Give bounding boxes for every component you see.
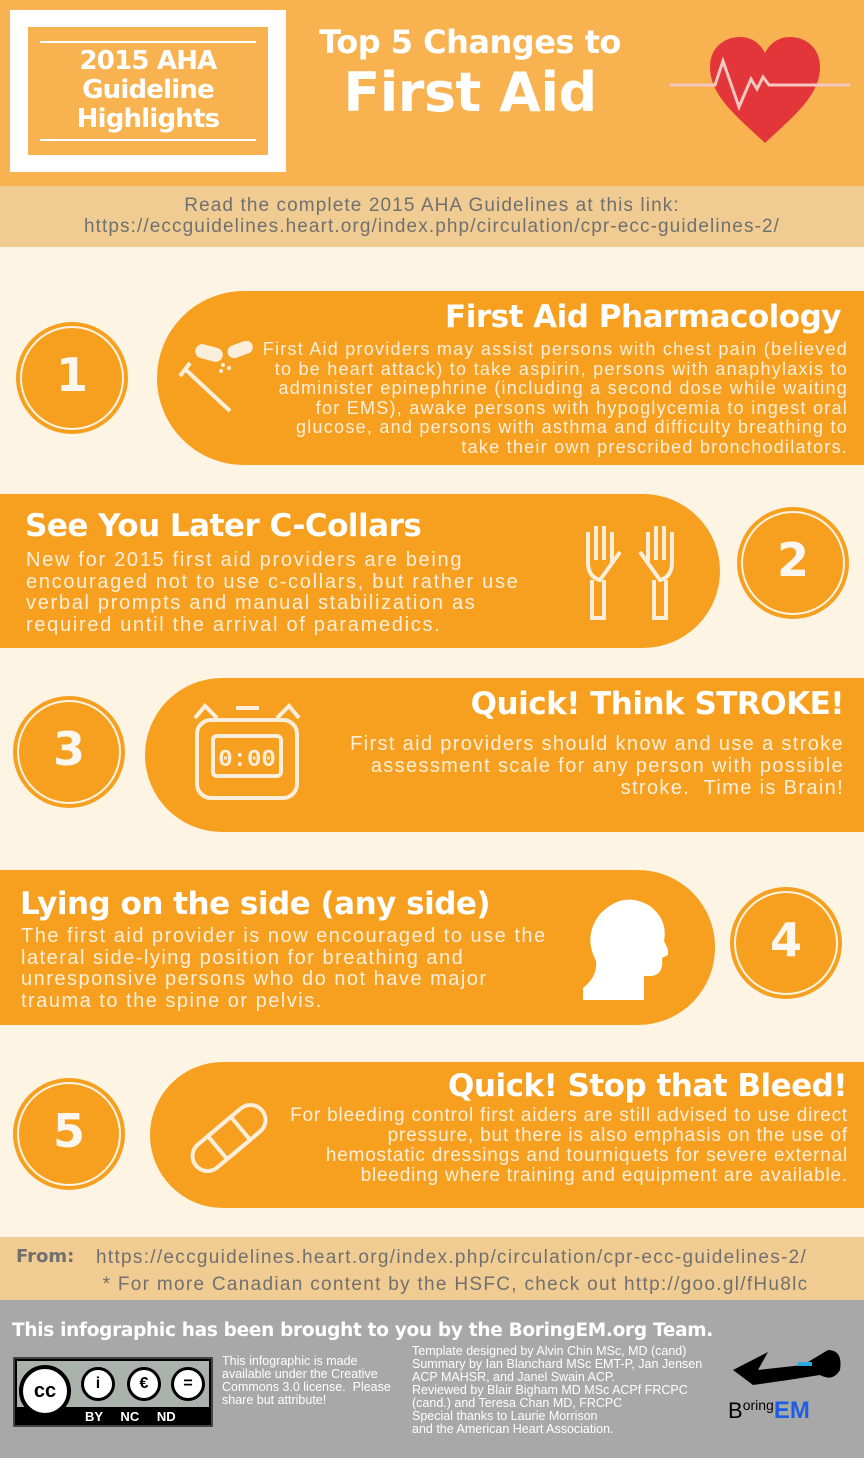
heading 2: See You Later C-Collars — [25, 508, 421, 544]
credits: ACP MAHSR, and Janel Swain ACP. — [412, 1370, 615, 1384]
text 1: First Aid providers may assist persons with chest pain (believed — [263, 339, 848, 359]
circle 3: 3 — [53, 722, 85, 776]
circle 4 — [730, 887, 842, 999]
from band: * For more Canadian content by the HSFC, check out http://goo.gl/fHu8lc — [103, 1274, 808, 1295]
footer heading: This infographic has been brought to you by the BoringEM.org Team. — [12, 1320, 713, 1341]
panel 1 — [157, 291, 864, 465]
circle 1 — [16, 322, 128, 434]
from band: From: — [16, 1246, 74, 1267]
text 5: pressure, but there is also emphasis on the use of — [388, 1125, 848, 1146]
circle 5 — [13, 1078, 125, 1190]
text 2: verbal prompts and manual stabilization as — [26, 592, 476, 614]
credits: Summary by Ian Blanchard MSc EMT-P, Jan Jensen — [412, 1357, 702, 1371]
panel 5 — [150, 1062, 864, 1208]
text 2: New for 2015 first aid providers are being — [26, 549, 463, 571]
text 1: administer epinephrine (including a second dose while waiting — [278, 378, 848, 398]
icon: pills syringe — [178, 341, 253, 412]
text 2: encouraged not to use c-collars, but rather use — [26, 570, 519, 592]
icon: bandage — [190, 1103, 268, 1173]
text 5: bleeding where training and equipment are available. — [361, 1165, 848, 1186]
license text: Commons 3.0 license. Please — [222, 1380, 391, 1394]
text 1: take their own prescribed bronchodilators. — [461, 436, 848, 456]
text 4: trauma to the spine or pelvis. — [21, 990, 323, 1012]
text 4 — [21, 925, 547, 1012]
credits: Reviewed by Blair Bigham MD MSc ACPf FRCPC — [412, 1383, 688, 1397]
heading 1: First Aid Pharmacology — [445, 299, 841, 335]
text 1: glucose, and persons with asthma and difficulty breathing to — [296, 417, 848, 437]
credits: and the American Heart Association. — [412, 1422, 614, 1436]
credits: Template designed by Alvin Chin MSc, MD (cand) — [412, 1344, 686, 1358]
circle 4: 4 — [770, 913, 802, 967]
circle 5: 5 — [53, 1104, 85, 1158]
title: First Aid — [343, 61, 597, 124]
text 2: required until the arrival of paramedics. — [26, 614, 441, 636]
text 3: stroke. Time is Brain! — [621, 777, 844, 799]
cc license badge: € — [140, 1375, 148, 1392]
icon: hands — [586, 526, 674, 620]
title: Top 5 Changes to — [319, 23, 621, 61]
cc license badge — [13, 1357, 213, 1427]
link band: https://eccguidelines.heart.org/index.php/circulation/cpr-ecc-guidelines-2/ — [84, 216, 780, 237]
text 5: hemostatic dressings and tourniquets for severe external — [326, 1145, 848, 1166]
text 3: assessment scale for any person with possible — [371, 755, 844, 777]
icon: heart — [670, 37, 850, 143]
cc license badge: cc — [34, 1380, 56, 1402]
header badge: 2015 AHA — [79, 46, 217, 76]
circle 1: 1 — [56, 348, 88, 402]
circle 2 — [737, 507, 849, 619]
icon: timer: 0:00 — [218, 747, 276, 774]
text 1: to be heart attack) to take aspirin, persons with anaphylaxis to — [275, 358, 848, 378]
credits: (cand.) and Teresa Chan MD, FRCPC — [412, 1396, 622, 1410]
circle 2: 2 — [777, 533, 809, 587]
license text: This infographic is made — [222, 1354, 357, 1368]
license text: share but attribute! — [222, 1393, 326, 1407]
circle 3 — [13, 696, 125, 808]
icon: head — [583, 900, 668, 1000]
heading 4: Lying on the side (any side) — [20, 886, 490, 922]
logo: BoringEM — [728, 1350, 840, 1424]
cc license badge: = — [183, 1375, 193, 1392]
header badge — [10, 10, 286, 172]
text 3: First aid providers should know and use a stroke — [350, 733, 844, 755]
text 4: unresponsive persons who do not have major — [21, 968, 488, 990]
text 4: lateral side-lying position for breathing and — [21, 946, 464, 968]
footer — [0, 1300, 864, 1458]
text 5: For bleeding control first aiders are still advised to use direct — [290, 1105, 848, 1126]
text 2 — [26, 549, 519, 636]
header badge: Guideline — [82, 75, 214, 105]
heading 5: Quick! Stop that Bleed! — [448, 1068, 847, 1104]
icon: timer — [194, 703, 300, 800]
header badge: Highlights — [77, 104, 219, 134]
link band — [0, 186, 864, 247]
text 1: for EMS), awake persons with hypoglycemia to ingest oral — [316, 398, 848, 418]
text 4: The first aid provider is now encouraged to use the — [21, 925, 547, 947]
header — [0, 0, 864, 186]
license text: available under the Creative — [222, 1367, 378, 1381]
heading 3: Quick! Think STROKE! — [471, 686, 844, 722]
from band: https://eccguidelines.heart.org/index.php/circulation/cpr-ecc-guidelines-2/ — [96, 1247, 807, 1268]
license text — [222, 1354, 391, 1407]
logo: BoringEM: BoringEM — [728, 1397, 810, 1424]
cc license badge: i — [96, 1375, 100, 1392]
text 1 — [263, 339, 848, 457]
credits — [412, 1344, 702, 1436]
credits: Special thanks to Laurie Morrison — [412, 1409, 598, 1423]
from band — [0, 1237, 864, 1300]
panel 2 — [0, 494, 720, 648]
title — [319, 23, 621, 124]
link band: Read the complete 2015 AHA Guidelines at this link: — [184, 195, 680, 216]
text 5 — [290, 1105, 848, 1186]
panel 4 — [0, 870, 715, 1025]
panel 3 — [145, 678, 864, 832]
cc license badge: BY NC ND — [85, 1409, 176, 1424]
text 3 — [350, 733, 844, 799]
